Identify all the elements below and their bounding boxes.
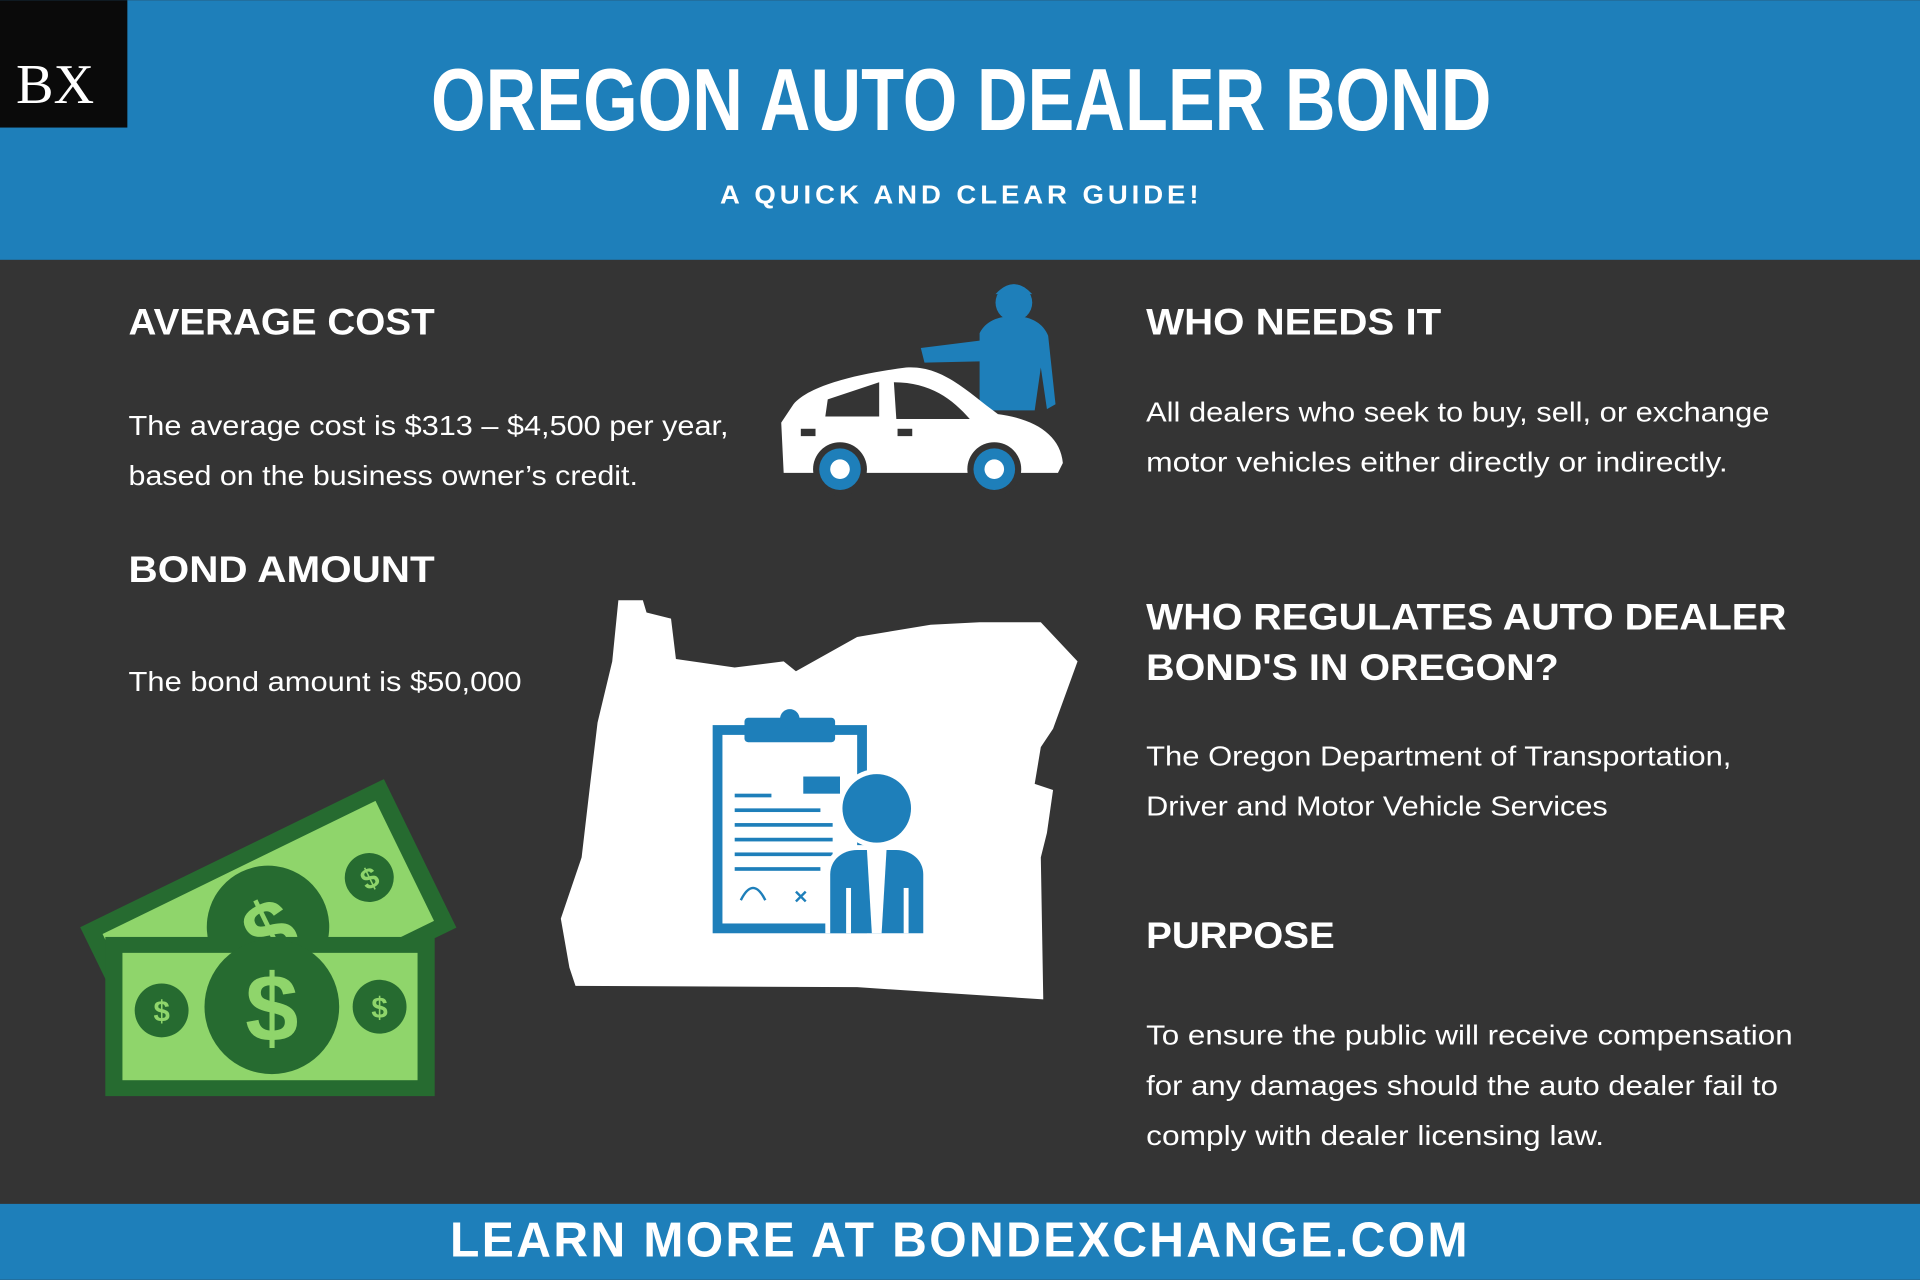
subtitle: A QUICK AND CLEAR GUIDE! <box>720 181 1202 209</box>
section: who regulates: BOND'S IN OREGON? <box>1146 647 1559 688</box>
section: who needs it: motor vehicles either directly or indirectly. <box>1146 447 1728 478</box>
section: who regulates: WHO REGULATES AUTO DEALER <box>1146 597 1787 638</box>
section: who regulates <box>1146 597 1787 822</box>
section: bond amount: The bond amount is $50,000 <box>129 666 522 697</box>
section: who needs it: WHO NEEDS IT <box>1146 301 1442 342</box>
icon: car and salesman <box>781 284 1063 496</box>
section: bond amount <box>129 549 522 697</box>
icon: oregon map with clipboard <box>561 600 1078 999</box>
icon: money: $ <box>228 878 313 985</box>
section: who regulates: The Oregon Department of Transportation, <box>1146 741 1731 772</box>
logo: BX: BX <box>16 54 94 116</box>
section: who needs it: All dealers who seek to buy, sell, or exchange <box>1146 396 1769 427</box>
logo: BX <box>0 0 127 128</box>
section: purpose: PURPOSE <box>1146 915 1335 956</box>
icon: money: $ <box>371 992 388 1025</box>
footer <box>0 1204 1920 1280</box>
section: who needs it <box>1146 301 1769 478</box>
section: purpose: comply with dealer licensing law. <box>1146 1120 1604 1151</box>
section: purpose: for any damages should the auto dealer fail to <box>1146 1070 1778 1101</box>
icon: money <box>80 779 456 1096</box>
title: OREGON AUTO DEALER BOND <box>431 50 1491 149</box>
icon: money: $ <box>153 995 170 1028</box>
icon: money: $ <box>245 956 298 1062</box>
section: average cost <box>129 301 729 491</box>
icon: money: $ <box>355 860 385 897</box>
section: purpose <box>1146 915 1793 1151</box>
section: average cost: based on the business owner’s credit. <box>129 460 638 491</box>
header band <box>0 0 1920 260</box>
section: average cost: AVERAGE COST <box>129 301 435 342</box>
footer: LEARN MORE AT BONDEXCHANGE.COM <box>450 1214 1470 1268</box>
section: who regulates: Driver and Motor Vehicle Services <box>1146 791 1608 822</box>
section: bond amount: BOND AMOUNT <box>129 549 435 590</box>
section: average cost: The average cost is $313 – $4,500 per year, <box>129 410 729 441</box>
section: purpose: To ensure the public will receive compensation <box>1146 1020 1793 1051</box>
